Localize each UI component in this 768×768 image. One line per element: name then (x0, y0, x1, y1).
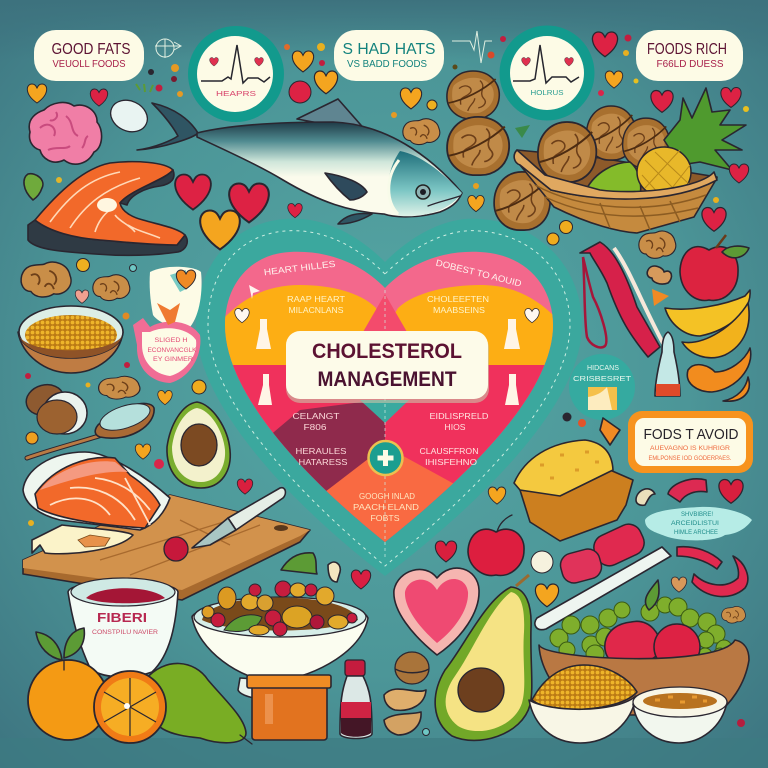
green pear (145, 663, 252, 744)
lower left text: HATARESS (298, 457, 348, 467)
dorsal fin (297, 99, 367, 132)
lower left text (292, 411, 348, 467)
pill label: bad fats vs bad foods: VS BADD FOODS (347, 59, 427, 70)
heart monitor badge left: HEAPRS (216, 89, 256, 98)
lower right text: CLAUSFFRON (420, 446, 478, 456)
eggs left (23, 381, 87, 434)
lower left text: F806 (304, 422, 327, 432)
tail (137, 103, 198, 150)
speech bubble with hearts: ECONVANCGLK (148, 347, 197, 354)
heart monitor badge left (188, 26, 284, 122)
large salad bowl (192, 581, 368, 698)
cloud note: HIMLE ARCHEE (674, 529, 719, 536)
grain bowl bottom (529, 665, 637, 743)
yellow band text right: MAABSEINS (433, 305, 485, 315)
basket front (520, 165, 717, 233)
bananas (665, 290, 750, 358)
heart section label: heart hills: HEART HILLES (263, 259, 336, 277)
pen (535, 547, 671, 630)
outer teal heart (196, 219, 582, 576)
fiber cup (68, 578, 178, 677)
callout: foods to avoid: FODS T AVOID (644, 426, 739, 443)
pineapple (637, 147, 691, 197)
callout circle: hidcans: HIDCANS (587, 365, 619, 372)
bottom point text: PAACH ELAND (353, 502, 419, 512)
cloud note (645, 507, 752, 540)
fish (137, 99, 462, 224)
cutting board (23, 495, 310, 600)
belly fin (338, 213, 372, 224)
bottom point text (353, 491, 419, 523)
spoon (27, 399, 154, 458)
red capsules (558, 520, 648, 586)
large pink heart (394, 568, 479, 655)
bottom point text: FOBTS (370, 513, 400, 523)
lower right text (420, 411, 488, 467)
heart monitor badge right: HOLRUS (530, 88, 564, 97)
speech bubble with hearts (133, 267, 202, 383)
salmon steak (28, 162, 187, 255)
head (388, 151, 462, 216)
yellow band text left (287, 294, 345, 315)
yellow band text right (427, 294, 489, 315)
lower right text: EIDLISPRELD (430, 411, 488, 421)
small bottle (340, 660, 372, 738)
pill label: good fats: VEUOLL FOODS (52, 59, 126, 70)
body (197, 122, 462, 217)
walnut cluster top (403, 71, 550, 230)
leaf (24, 174, 43, 200)
yellow band text right: CHOLEEFTEN (427, 294, 489, 304)
red arcs (677, 547, 748, 597)
lower left text: HERAULES (296, 446, 347, 456)
lime (586, 162, 641, 197)
red apple right (680, 235, 749, 300)
pill label: foods rich (636, 30, 743, 81)
knife and cherry (164, 488, 285, 561)
nuts left (21, 262, 140, 399)
bread cheese block (514, 440, 633, 541)
plus icon (368, 441, 402, 475)
note card on dish (32, 525, 133, 554)
pineapple leaves (664, 88, 746, 170)
callout circle: hidcans: CRISBESRET (573, 376, 632, 383)
heart monitor badge right (500, 26, 594, 120)
glass bottle (655, 332, 680, 396)
pectoral fin (325, 173, 367, 200)
eye (416, 185, 430, 199)
basket back (517, 150, 717, 195)
red arch and heart lower right (636, 479, 743, 505)
salmon dish (23, 452, 170, 530)
orange jar (247, 675, 331, 740)
walnuts in basket (586, 106, 636, 160)
arrow icon (249, 285, 260, 299)
orange fruit shapes (687, 348, 751, 401)
central heart diagram (196, 219, 582, 576)
lower right text: HIOS (444, 422, 466, 432)
yellow band text left: RAAP HEART (287, 294, 345, 304)
flask icons (256, 319, 520, 405)
speech bubble with hearts: SLIGED H (154, 337, 188, 344)
callout circle: hidcans (569, 354, 635, 420)
red ribbon (580, 242, 664, 357)
center title box: MANAGEMENT (318, 368, 457, 391)
pill label: foods rich: F66LD DUESS (656, 59, 724, 70)
white bowl bottom right (633, 687, 727, 743)
mushroom and heart near board (328, 562, 371, 589)
speech bubble with hearts: EY GINMER (153, 356, 193, 363)
heart icons (235, 308, 539, 323)
brain (29, 103, 102, 164)
callout: foods to avoid (628, 411, 753, 473)
walnut piece and tan blob right (639, 231, 676, 306)
orange half (94, 671, 166, 743)
callout: foods to avoid: AUEVAGNO IS KUHRIGR (650, 445, 730, 452)
basket with walnuts and pineapple (514, 88, 746, 233)
pill label: good fats (34, 30, 144, 81)
leaf near board (281, 553, 317, 574)
pill label: good fats: GOOD FATS (52, 41, 130, 58)
grain bowl left (18, 306, 123, 373)
lower left text: CELANGT (292, 411, 340, 421)
yellow band text left: MILACNLANS (288, 305, 344, 315)
cloud note: SHVBIBRE! (681, 511, 713, 518)
fiber cup: FIBERI (97, 611, 147, 625)
pear avocado large (435, 575, 532, 740)
callout: foods to avoid: EMLPONSE IOD GODERPAES. (648, 455, 732, 462)
salad bowl right (539, 580, 749, 715)
center title box (286, 331, 489, 403)
pill label: foods rich: FOODS RICH (647, 41, 727, 58)
center title box: CHOLESTEROL (312, 340, 462, 363)
heart section label: dobest to avoid: DOBEST TO AOUID (435, 258, 523, 289)
pill label: bad fats vs bad foods (334, 30, 444, 81)
outline ornaments (155, 31, 492, 63)
egg (105, 94, 153, 138)
orange whole (28, 628, 108, 740)
fiber cup: CONSTPILU NAVIER (92, 629, 158, 636)
lower right text: IHISFEHNO (425, 457, 477, 467)
cloud note: ARCEIDLISTUI (671, 520, 719, 527)
avocado half left (167, 402, 230, 488)
stacked nuts (384, 652, 429, 735)
bottom point text: GOOGH INLAD (359, 491, 415, 501)
pill label: bad fats vs bad foods: S HAD HATS (342, 41, 436, 58)
heart segments (220, 245, 560, 550)
red apple small (468, 515, 524, 576)
